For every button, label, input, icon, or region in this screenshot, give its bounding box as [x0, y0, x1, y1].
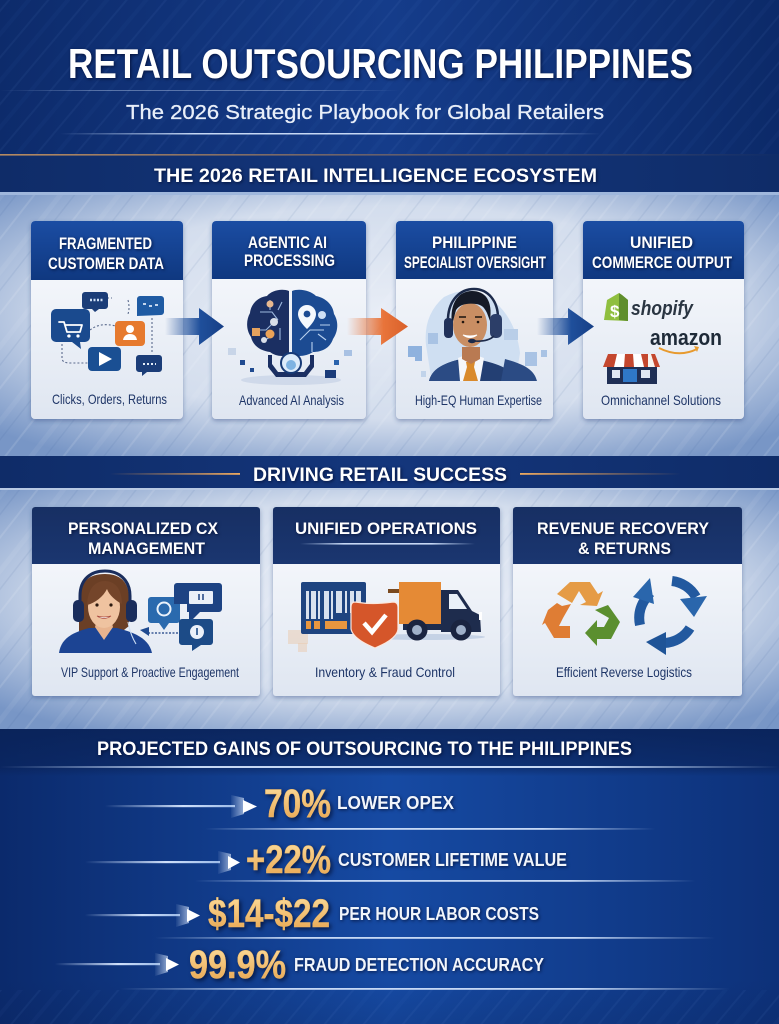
header background [0, 0, 779, 196]
stat: +22% customer lifetime value: +22% [246, 838, 331, 882]
card: Philippine specialist oversight: SPECIALIST OVERSIGHT [404, 253, 546, 272]
icon: recycle arrows [542, 582, 620, 646]
stat: 99.9% fraud detection accuracy [55, 943, 544, 987]
stat: 99.9% fraud detection accuracy: FRAUD DETECTION ACCURACY [294, 955, 544, 975]
card: fragmented customer data: CUSTOMER DATA [48, 254, 164, 273]
arrow: blue one [165, 308, 224, 345]
card: personalized CX: VIP Support & Proactive Engagement [61, 664, 239, 680]
icon: barcode, shield and delivery truck [288, 582, 485, 652]
icon: storefront [603, 354, 660, 384]
arrow: navy [537, 308, 594, 345]
card: fragmented customer data: Clicks, Orders, Returns [52, 391, 167, 407]
logo: shopify: shopify [631, 298, 694, 320]
logo: shopify: $ [610, 302, 620, 321]
card: personalized CX: MANAGEMENT [88, 539, 206, 558]
stat: $14-$22 labor costs: PER HOUR LABOR COSTS [339, 904, 539, 924]
icon: data bubbles [51, 292, 164, 376]
panel: projected gains background [0, 729, 779, 1024]
card: unified commerce output: COMMERCE OUTPUT [592, 253, 732, 272]
heading: projected gains: PROJECTED GAINS OF OUTSOURCING TO THE PHILIPPINES [97, 739, 632, 760]
card: revenue recovery and returns: & RETURNS [578, 539, 671, 558]
card: agentic AI processing: AGENTIC AI [248, 233, 327, 252]
panel: ecosystem background [0, 195, 779, 456]
panel: success background [0, 490, 779, 729]
card: unified commerce output: UNIFIED [630, 233, 693, 252]
card: personalized CX: PERSONALIZED CX [68, 519, 219, 538]
card: Philippine specialist oversight [396, 221, 553, 419]
subtitle: The 2026 Strategic Playbook for Global Retailers [126, 102, 604, 124]
stat: 70% lower OPEX: 70% [264, 782, 331, 826]
stat: +22% customer lifetime value: CUSTOMER LIFETIME VALUE [338, 850, 567, 870]
stat: +22% customer lifetime value [85, 838, 567, 882]
card: personalized CX [32, 507, 260, 696]
card: revenue recovery and returns [513, 507, 742, 696]
card: Philippine specialist oversight: PHILIPPINE [432, 233, 517, 252]
stat: 99.9% fraud detection accuracy: 99.9% [189, 943, 286, 987]
logo: amazon: amazon [650, 325, 722, 350]
stat: 70% lower OPEX [105, 782, 454, 826]
stat: $14-$22 labor costs [85, 892, 539, 936]
card: agentic AI processing: Advanced AI Analysis [239, 392, 344, 408]
icon: male specialist with headset [408, 289, 547, 381]
stat: $14-$22 labor costs: $14-$22 [208, 892, 330, 936]
card: unified operations: Inventory & Fraud Control [315, 664, 455, 680]
card: Philippine specialist oversight: High-EQ Human Expertise [415, 392, 542, 408]
card: agentic AI processing: PROCESSING [244, 251, 335, 270]
card: unified operations: UNIFIED OPERATIONS [295, 519, 477, 538]
section band: ecosystem heading [0, 154, 779, 195]
section band: ecosystem heading: THE 2026 RETAIL INTELLIGENCE ECOSYSTEM [154, 165, 597, 187]
logo: shopify [604, 293, 694, 321]
card: unified commerce output: Omnichannel Solutions [601, 392, 721, 408]
icon: female agent and chat bubbles [59, 571, 222, 653]
card: unified operations [273, 507, 500, 696]
card: revenue recovery and returns: Efficient Reverse Logistics [556, 664, 692, 680]
stat: 70% lower OPEX: LOWER OPEX [337, 793, 454, 813]
card: unified commerce output [583, 221, 744, 419]
icon: circular blue arrows [633, 578, 707, 655]
section band: driving retail success: DRIVING RETAIL SUCCESS [253, 465, 507, 486]
icon: AI brain [228, 290, 352, 385]
section band: driving retail success [0, 456, 779, 490]
card: revenue recovery and returns: REVENUE RECOVERY [537, 519, 710, 538]
arrow: orange [347, 308, 408, 345]
card: agentic AI processing [212, 221, 366, 419]
card: fragmented customer data: FRAGMENTED [59, 234, 152, 253]
card: fragmented customer data [31, 221, 183, 419]
